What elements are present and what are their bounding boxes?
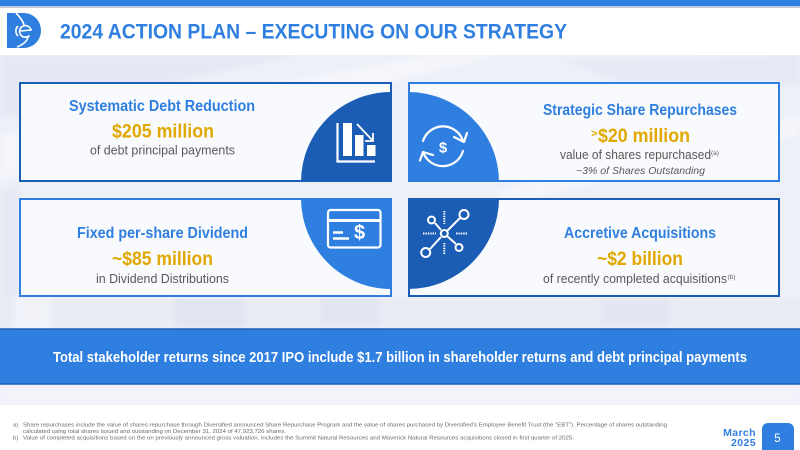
description: shares repurchased: (a) xyxy=(711,150,719,157)
note: percent outstanding: ~3% of Shares Outstanding xyxy=(576,165,705,177)
figure: 205 million: $205 million xyxy=(112,122,214,142)
footnotes: b) xyxy=(13,436,18,442)
footnotes: a) xyxy=(13,422,18,428)
heading: share repurchases: Strategic Share Repurchases xyxy=(543,102,737,119)
footnotes xyxy=(13,422,667,442)
page number tab xyxy=(762,423,794,450)
icon: declining bar chart xyxy=(338,123,376,162)
heading: acquisitions: Accretive Acquisitions xyxy=(564,225,716,242)
panel: fixed per-share dividend xyxy=(20,198,391,296)
quarter circle: bright blue xyxy=(301,198,391,289)
background photo wash xyxy=(0,55,800,405)
figure: 20 million: $20 million xyxy=(598,126,690,147)
callout band: total stakeholder returns xyxy=(0,329,800,384)
quarter circle: dark blue xyxy=(408,198,499,289)
top header bar xyxy=(0,0,800,8)
icon: payment card xyxy=(328,210,380,248)
description: completed acquisitions: (b) xyxy=(728,274,735,281)
quarter circle: dark blue xyxy=(301,92,391,182)
figure: 85 million: ~$85 million xyxy=(112,249,213,270)
page number tab: 5 xyxy=(774,433,781,445)
icon: dollar refresh xyxy=(420,126,467,166)
panel: accretive acquisitions xyxy=(408,198,779,296)
figure: 20 million: > xyxy=(591,128,597,140)
description: shares repurchased: value of shares repurchased xyxy=(560,148,711,162)
panel: strategic share repurchases xyxy=(408,83,779,182)
description: debt principal: of debt principal payments xyxy=(90,144,235,158)
company logo xyxy=(7,13,41,48)
icon: network nodes xyxy=(421,210,468,257)
description: dividend distributions: in Dividend Distributions xyxy=(96,272,229,286)
heading: dividend: Fixed per-share Dividend xyxy=(77,225,248,242)
footnotes: Share repurchases include the value of shares repurchase through Diversified announced Share Repurchase Program and the value of shares purchased by Diversified's Employee Benefit Trust (the "EBT"). Percentage of shares outstanding xyxy=(23,422,667,428)
date label xyxy=(723,427,756,449)
icon: payment card: $ xyxy=(354,222,365,244)
quarter circle: bright blue xyxy=(408,92,499,182)
description: completed acquisitions: of recently completed acquisitions xyxy=(543,272,727,286)
panel: systematic debt reduction xyxy=(20,83,391,182)
title: 2024 ACTION PLAN – EXECUTING ON OUR STRATEGY xyxy=(60,20,567,44)
figure: 2 billion: ~$2 billion xyxy=(597,249,683,270)
footnotes: Value of completed acquisitions based on the on previously announced gross valuation, includes the Summit Natural Resources and Maverick Natural Resources acquisitions closed in first quarter of 2025. xyxy=(23,436,574,442)
icon: dollar refresh: $ xyxy=(439,140,448,156)
footnotes: calculated using total shares issued and outstanding on December 31, 2024 of 47,923,726 shares. xyxy=(23,429,286,435)
date label: March xyxy=(723,427,756,439)
heading: debt reduction: Systematic Debt Reduction xyxy=(69,98,255,115)
date label: 2025 xyxy=(731,437,756,449)
